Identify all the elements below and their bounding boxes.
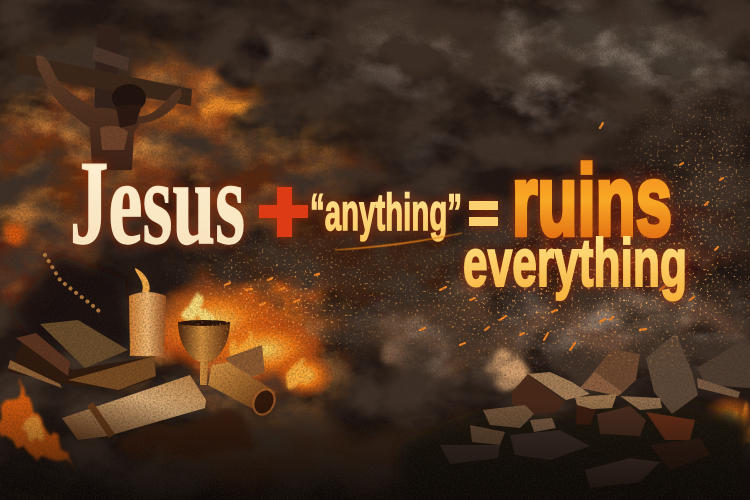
title word: Jesus: Jesus [70, 136, 245, 269]
relics: books, rosary, candle, chalice and scrolls [8, 255, 279, 456]
word: anything in quotes: “anything” [310, 184, 462, 242]
stone chunks [410, 372, 710, 488]
cross vertical beam [94, 24, 120, 170]
rubble: broken stone pile [400, 333, 750, 500]
right scroll [208, 345, 279, 418]
word: ruins: ruins [512, 145, 672, 257]
plus sign [259, 187, 308, 237]
dark cloth behind books [10, 255, 130, 350]
light streak under anything [335, 233, 462, 250]
fine ember specks [156, 78, 750, 388]
ground shading [0, 400, 750, 500]
title: equation headline [70, 136, 687, 301]
cross plaque [92, 46, 129, 71]
icon: crucifix [17, 24, 192, 170]
cross horizontal beam [17, 54, 192, 106]
rosary beads [45, 255, 100, 312]
figure of Jesus [36, 55, 182, 170]
debris [120, 416, 262, 456]
candle [129, 268, 166, 356]
large slabs [580, 333, 750, 414]
left scroll [62, 375, 206, 440]
fire: glowing flames behind the relics [0, 277, 750, 464]
grey smoke texture [258, 0, 750, 398]
ground shadow under rubble [400, 400, 750, 500]
equals sign [469, 201, 498, 226]
sparks: flying embers [156, 78, 750, 388]
books [8, 320, 156, 390]
chalice [178, 320, 230, 385]
